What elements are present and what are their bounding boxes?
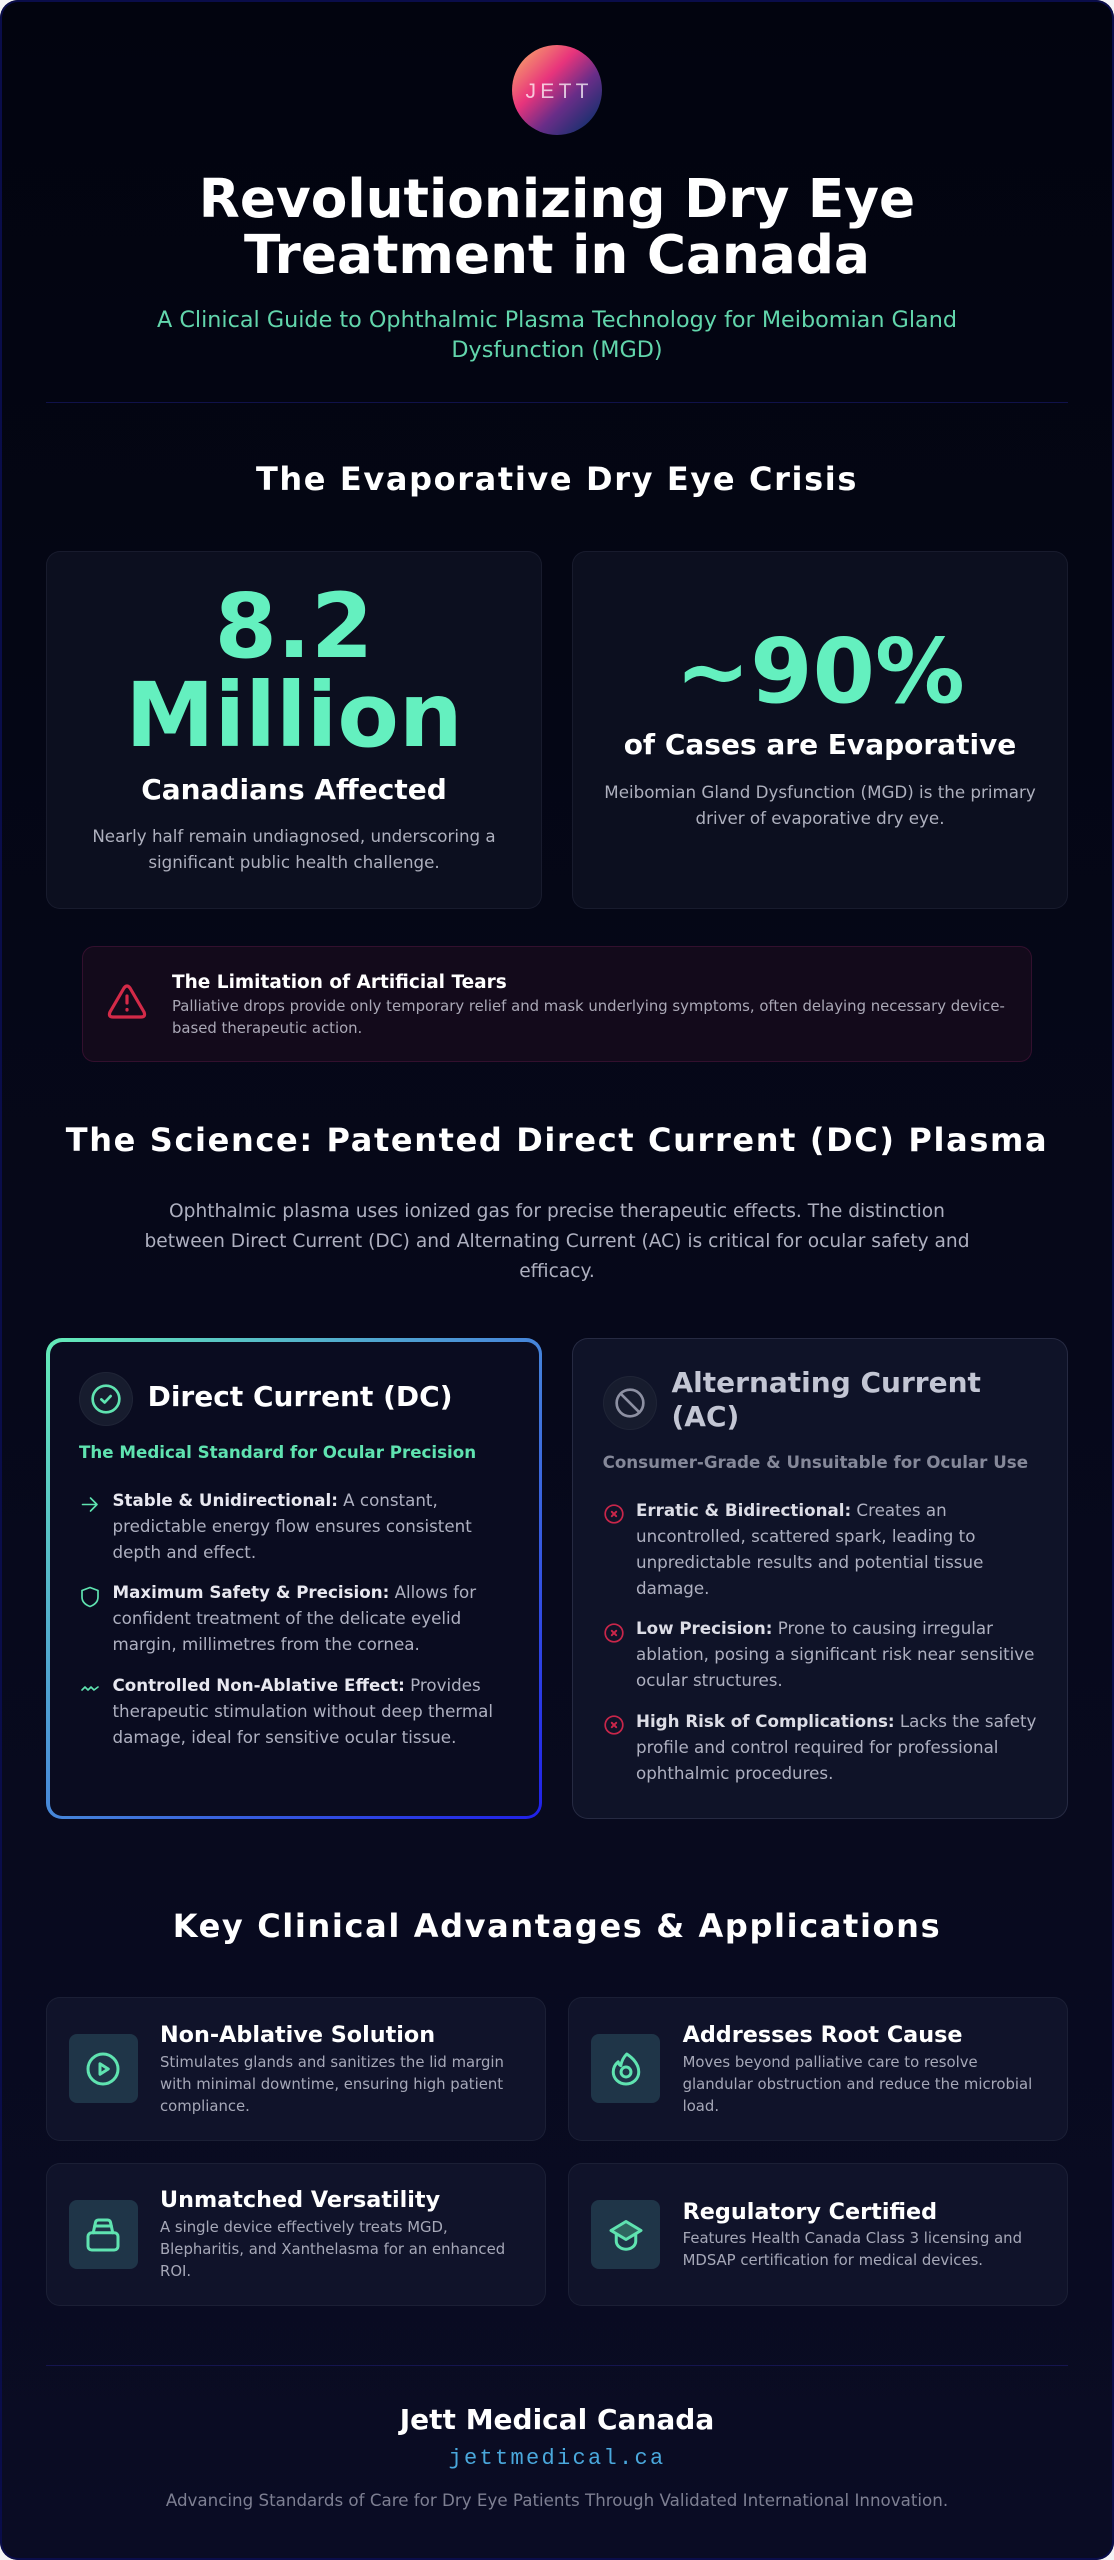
list item: low precision bbox=[636, 1618, 1034, 1690]
subtitle: Dysfunction (MGD) bbox=[451, 337, 663, 363]
panel: 90 percent stat card bbox=[572, 551, 1068, 909]
heading: Key Clinical Advantages: Key Clinical Advantages & Applications bbox=[173, 1907, 941, 1945]
stat label: Canadians Affected bbox=[141, 773, 447, 806]
stat number: Million bbox=[125, 664, 463, 768]
icon: red x 2 bbox=[604, 1623, 624, 1643]
stat description bbox=[604, 782, 1036, 828]
feature description: A single device effectively treats MGD, bbox=[160, 2218, 448, 2236]
icon: shield bbox=[81, 1586, 99, 1608]
feature description: Blepharitis, and Xanthelasma for an enhanced bbox=[160, 2240, 505, 2258]
list item: complications: High Risk of Complications: Lacks the safety bbox=[636, 1711, 1036, 1731]
panel: Non-Ablative Solution bbox=[46, 1997, 546, 2141]
list item: stable bbox=[112, 1490, 472, 1562]
feature description: compliance. bbox=[160, 2097, 250, 2115]
list item: complications bbox=[636, 1711, 1036, 1783]
feature description: ROI. bbox=[160, 2262, 191, 2280]
icon: wave bbox=[81, 1686, 99, 1691]
science intro text bbox=[144, 1201, 970, 1282]
list item: erratic: damage. bbox=[636, 1578, 709, 1598]
footer brand name: Jett Medical Canada bbox=[400, 2403, 714, 2436]
icon: arrow bbox=[82, 1497, 98, 1512]
stat number: 8.2 bbox=[215, 575, 373, 679]
feature description: Moves beyond palliative care to resolve bbox=[683, 2053, 978, 2071]
panel: Direct Current bbox=[46, 1338, 542, 1819]
title: Treatment in Canada bbox=[244, 224, 870, 286]
AC heading: (AC) bbox=[672, 1400, 739, 1433]
panel: Unmatched Versatility bbox=[46, 2163, 546, 2306]
callout text: Palliative drops provide only temporary relief and mask underlying symptoms, often delaying necessary device- bbox=[172, 997, 1005, 1015]
feature description bbox=[683, 2053, 1032, 2115]
stat number bbox=[125, 575, 463, 768]
list item: complications: ophthalmic procedures. bbox=[636, 1763, 833, 1783]
feature description: glandular obstruction and reduce the microbial bbox=[683, 2075, 1032, 2093]
panel: 8.2 million stat card bbox=[46, 551, 542, 909]
icon: red x 1 bbox=[604, 1504, 624, 1524]
feature title: Non-Ablative Solution bbox=[160, 2022, 435, 2048]
feature description: Stimulates glands and sanitizes the lid margin bbox=[160, 2053, 504, 2071]
AC heading: Alternating Current bbox=[672, 1366, 981, 1399]
list item: erratic: uncontrolled, scattered spark, leading to bbox=[636, 1526, 975, 1546]
logo: JETT gradient circle bbox=[512, 45, 602, 135]
feature description bbox=[683, 2229, 1022, 2269]
science intro text: efficacy. bbox=[519, 1261, 595, 1282]
panel: Regulatory Certified bbox=[568, 2163, 1068, 2306]
feature title: Unmatched Versatility bbox=[160, 2187, 440, 2213]
subtitle bbox=[157, 307, 957, 363]
icon: red x 3 bbox=[604, 1715, 624, 1735]
list item: low precision: ablation, posing a significant risk near sensitive bbox=[636, 1644, 1034, 1664]
stat description: Nearly half remain undiagnosed, underscoring a bbox=[92, 826, 496, 846]
stat label: of Cases are Evaporative bbox=[624, 728, 1016, 761]
list item: non-ablative: Controlled Non-Ablative Effect: Provides bbox=[112, 1675, 481, 1695]
list item: low precision: ocular structures. bbox=[636, 1670, 783, 1690]
heading: The Science: The Science: Patented Direct Current (DC) Plasma bbox=[66, 1121, 1048, 1159]
feature description: MDSAP certification for medical devices. bbox=[683, 2251, 983, 2269]
list item: low precision: Low Precision: Prone to causing irregular bbox=[636, 1618, 993, 1638]
feature title: Addresses Root Cause bbox=[683, 2022, 962, 2048]
AC subheading: Consumer-Grade & Unsuitable for Ocular Use bbox=[603, 1452, 1028, 1472]
icon: warning triangle bbox=[108, 984, 146, 1019]
stat description bbox=[92, 826, 496, 872]
list item: non-ablative bbox=[112, 1675, 493, 1747]
list item: stable: predictable energy flow ensures consistent bbox=[112, 1516, 472, 1536]
footer url: jettmedical.ca bbox=[448, 2446, 666, 2470]
subtitle: A Clinical Guide to Ophthalmic Plasma Technology for Meibomian Gland bbox=[157, 307, 957, 333]
AC heading bbox=[672, 1366, 981, 1433]
list item: complications: profile and control required for professional bbox=[636, 1737, 998, 1757]
feature description bbox=[160, 2218, 505, 2280]
feature description bbox=[160, 2053, 504, 2115]
feature description: with minimal downtime, ensuring high patient bbox=[160, 2075, 503, 2093]
list item: erratic: Erratic & Bidirectional: Creates an bbox=[636, 1500, 947, 1520]
callout title: The Limitation of Artificial Tears bbox=[172, 972, 507, 993]
panel: Alternating Current bbox=[572, 1338, 1068, 1819]
panel: Addresses Root Cause bbox=[568, 1997, 1068, 2141]
callout text bbox=[172, 997, 1005, 1037]
icon: flame bbox=[591, 2034, 660, 2103]
stat description: driver of evaporative dry eye. bbox=[695, 808, 945, 828]
callout text: based therapeutic action. bbox=[172, 1019, 362, 1037]
title: Revolutionizing Dry Eye bbox=[199, 168, 915, 230]
icon: prohibited bbox=[603, 1376, 657, 1430]
footer tagline: Advancing Standards of Care for Dry Eye Patients Through Validated International Innovation. bbox=[166, 2490, 948, 2510]
stat number: ~90% bbox=[675, 620, 965, 724]
stat description: Meibomian Gland Dysfunction (MGD) is the primary bbox=[604, 782, 1036, 802]
icon: graduation cap bbox=[591, 2200, 660, 2269]
icon: check circle bbox=[79, 1372, 133, 1426]
DC heading: Direct Current (DC) bbox=[148, 1380, 453, 1413]
list item: safety: confident treatment of the delicate eyelid bbox=[112, 1608, 461, 1628]
heading: The Evaporative Dry Eye Crisis: The Evaporative Dry Eye Crisis bbox=[256, 460, 858, 498]
list item: non-ablative: damage, ideal for sensitive ocular tissue. bbox=[112, 1727, 456, 1747]
DC subheading: The Medical Standard for Ocular Precision bbox=[79, 1442, 476, 1462]
list item: stable: depth and effect. bbox=[112, 1542, 256, 1562]
title bbox=[199, 168, 915, 286]
list item: erratic: unpredictable results and potential tissue bbox=[636, 1552, 983, 1572]
list item: safety: Maximum Safety & Precision: Allows for bbox=[112, 1582, 476, 1602]
science intro text: between Direct Current (DC) and Alternating Current (AC) is critical for ocular safety and bbox=[144, 1231, 970, 1252]
list item: non-ablative: therapeutic stimulation without deep thermal bbox=[112, 1701, 493, 1721]
list item: erratic bbox=[636, 1500, 983, 1598]
stat description: significant public health challenge. bbox=[148, 852, 440, 872]
list item: stable: Stable & Unidirectional: A constant, bbox=[112, 1490, 438, 1510]
icon: play circle bbox=[68, 2034, 138, 2103]
list item: safety bbox=[112, 1582, 476, 1654]
science intro text: Ophthalmic plasma uses ionized gas for precise therapeutic effects. The distinction bbox=[169, 1201, 945, 1222]
list item: safety: margin, millimetres from the cornea. bbox=[112, 1634, 420, 1654]
callout: limitation of artificial tears bbox=[82, 946, 1032, 1062]
feature description: load. bbox=[683, 2097, 719, 2115]
feature title: Regulatory Certified bbox=[683, 2199, 937, 2225]
logo: JETT gradient circle: JETT bbox=[526, 80, 589, 103]
feature description: Features Health Canada Class 3 licensing and bbox=[683, 2229, 1022, 2247]
icon: jar bbox=[68, 2200, 138, 2269]
